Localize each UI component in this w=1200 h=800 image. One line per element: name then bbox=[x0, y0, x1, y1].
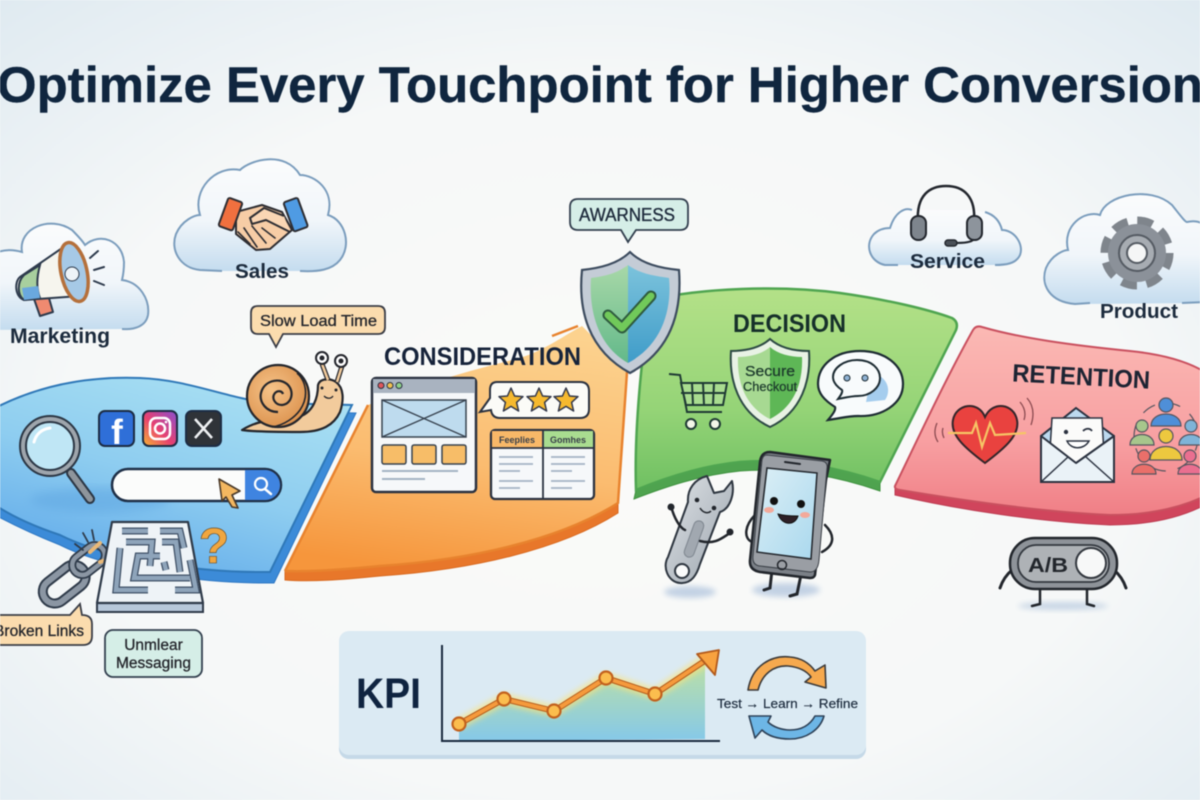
callout: Unclear Messaging: Unmlear bbox=[124, 637, 183, 654]
icon: secure checkout shield: Checkout bbox=[743, 379, 797, 394]
icon: smiling envelope bbox=[1041, 408, 1114, 482]
icon: cursor bbox=[219, 479, 240, 508]
icon: heart with pulse bbox=[935, 398, 1033, 463]
callout: AWARNESS: AWARNESS bbox=[579, 205, 675, 225]
callout: Unclear Messaging: Messaging bbox=[116, 655, 191, 672]
icon: handshake bbox=[218, 198, 308, 250]
label: DECISION: DECISION bbox=[733, 310, 846, 338]
icon: orange cycle arrow bbox=[748, 657, 826, 690]
title: Optimize Every Touchpoint for Higher Conversion bbox=[0, 57, 1200, 113]
icon: Instagram bbox=[143, 411, 177, 446]
icon: shopping cart bbox=[669, 374, 727, 429]
panel: awareness stage (blue) bbox=[0, 378, 356, 583]
panel: decision stage (green) bbox=[634, 289, 957, 499]
line chart bbox=[442, 645, 720, 741]
label: Service: Service bbox=[910, 251, 985, 273]
callout: Slow Load Time: Slow Load Time bbox=[260, 313, 377, 330]
icon: community of people bbox=[1130, 398, 1200, 474]
label: CONSIDERATION: CONSIDERATION bbox=[384, 343, 581, 371]
panel: consideration stage (orange) bbox=[285, 326, 628, 581]
icon: chat bubbles bbox=[818, 351, 903, 420]
comparison table bbox=[491, 430, 594, 499]
icon: blue cycle arrow bbox=[749, 716, 824, 739]
character: wrench bbox=[664, 476, 734, 598]
label: Test Learn Refine: Test → Learn → Refine bbox=[717, 696, 858, 711]
cloud: Marketing bbox=[0, 224, 148, 348]
comparison table: Gomhes bbox=[550, 435, 586, 445]
callout: Slow Load Time bbox=[251, 306, 385, 347]
label: Marketing: Marketing bbox=[10, 325, 110, 348]
icon: shield with check bbox=[581, 252, 679, 373]
cloud: Service bbox=[869, 186, 1021, 273]
icon: maze bbox=[97, 522, 203, 612]
icon: snail bbox=[242, 352, 347, 432]
icon: headset bbox=[911, 186, 982, 246]
icon: magnifying glass bbox=[23, 419, 90, 499]
panel: KPI and test-learn-refine bbox=[339, 631, 866, 759]
icon: Facebook bbox=[99, 411, 134, 452]
icon: gear bbox=[1106, 222, 1168, 284]
callout: AWARNESS bbox=[570, 199, 688, 242]
search bar bbox=[112, 469, 281, 508]
icon: Facebook: f bbox=[111, 413, 123, 452]
icon: megaphone bbox=[16, 240, 104, 316]
character: smiling phone bbox=[746, 452, 832, 597]
icon: question mark: ? bbox=[199, 518, 229, 574]
callout: Unclear Messaging bbox=[105, 630, 202, 677]
character: A/B toggle: A/B bbox=[1028, 555, 1068, 577]
label: RETENTION: RETENTION bbox=[1012, 359, 1151, 395]
comparison table: Feeplies bbox=[499, 435, 535, 445]
label: KPI: KPI bbox=[356, 670, 421, 718]
panel: retention stage (pink) bbox=[895, 326, 1200, 525]
icon: browser window bbox=[372, 378, 476, 492]
character: A/B toggle bbox=[1000, 538, 1126, 610]
label: Product: Product bbox=[1100, 301, 1178, 323]
icon: broken chain bbox=[37, 530, 113, 608]
icon: X bbox=[186, 411, 221, 446]
label: Sales: Sales bbox=[235, 261, 289, 283]
cloud: Sales bbox=[174, 159, 346, 283]
icon: secure checkout shield: Secure bbox=[745, 364, 795, 380]
icon: secure checkout shield bbox=[731, 339, 809, 427]
cloud: Product bbox=[1044, 194, 1200, 323]
review bubble with stars bbox=[480, 382, 589, 418]
callout: Broken Links bbox=[0, 604, 92, 645]
